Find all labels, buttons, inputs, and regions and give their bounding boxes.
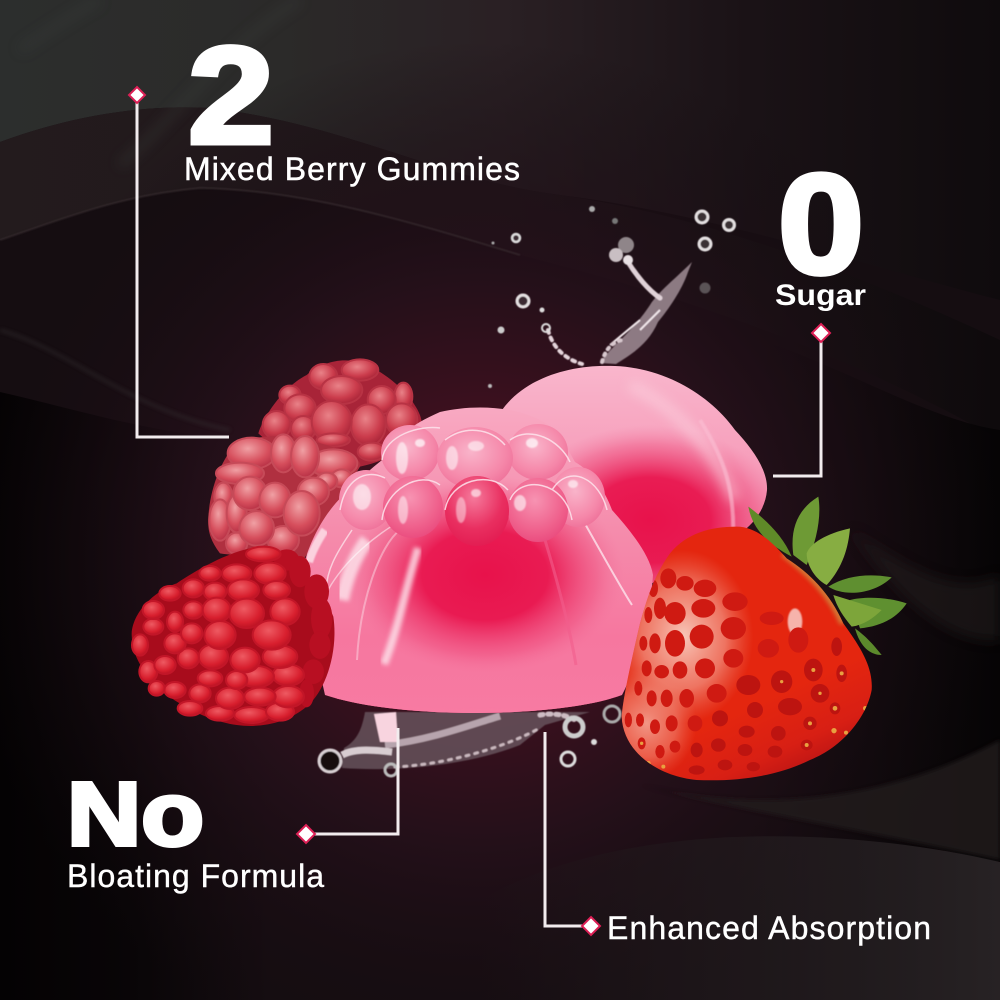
water splash: bottom bbox=[319, 706, 620, 776]
raspberry: middle bbox=[208, 434, 360, 560]
callout: No Bloating Formula: No bbox=[67, 765, 204, 865]
callout: No Bloating Formula bbox=[67, 765, 324, 894]
callout line: Enhanced Absorption bbox=[545, 732, 600, 935]
water splash: top bbox=[488, 206, 734, 388]
callout: 2 Mixed Berry Gummies bbox=[184, 19, 520, 187]
strawberry bbox=[597, 497, 907, 780]
front gummy bbox=[303, 407, 653, 722]
callout: No Bloating Formula: Bloating Formula bbox=[67, 858, 324, 894]
callout line: Sugar bbox=[773, 324, 830, 476]
callout: 0 Sugar: Sugar bbox=[775, 279, 866, 312]
callout line: Bloating Formula bbox=[297, 728, 398, 843]
raspberry: top bbox=[258, 359, 422, 467]
raspberry: front bbox=[132, 547, 334, 726]
callout: 2 Mixed Berry Gummies: Mixed Berry Gummies bbox=[184, 151, 520, 187]
callout line: Mixed Berry Gummies bbox=[129, 87, 229, 437]
callout: 2 Mixed Berry Gummies: 2 bbox=[188, 19, 274, 173]
callout: 0 Sugar: 0 bbox=[778, 145, 864, 304]
strawberry leaves bbox=[748, 497, 907, 655]
back gummy bbox=[502, 366, 768, 584]
callout: Enhanced Absorption: Enhanced Absorption bbox=[607, 910, 931, 946]
